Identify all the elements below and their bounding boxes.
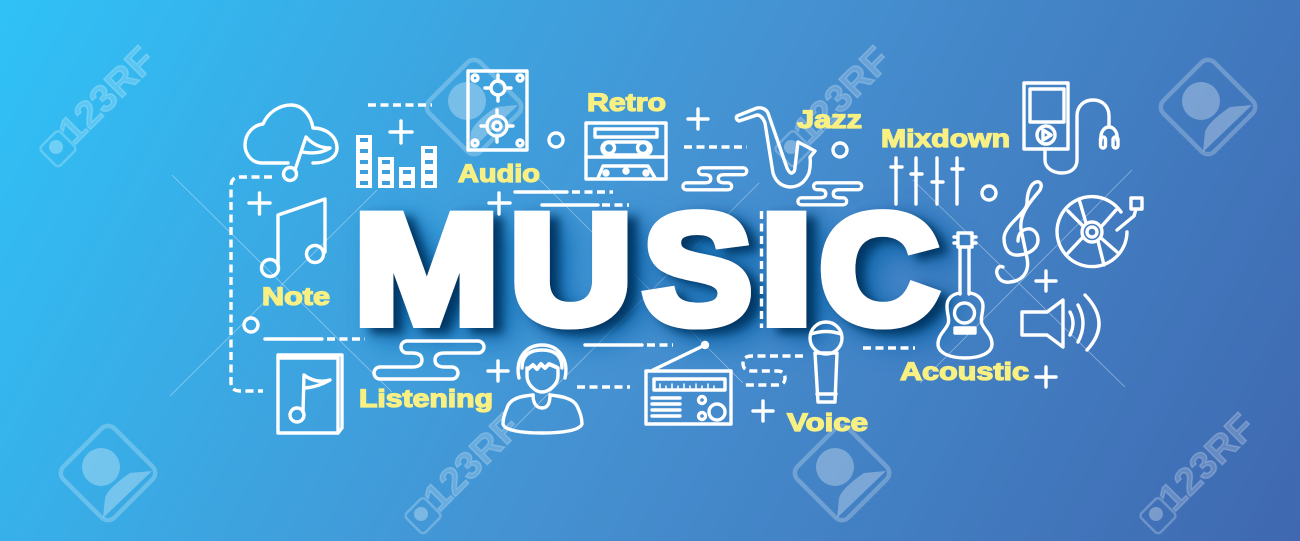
watermark: badge top centre	[423, 56, 525, 158]
title: MUSIC	[354, 181, 939, 357]
watermark: badge bottom left	[57, 422, 159, 524]
icon: saxophone	[736, 108, 815, 187]
label: Audio: Audio	[458, 160, 540, 188]
watermark: badge top right	[1157, 56, 1259, 158]
label: Acoustic: Acoustic	[900, 358, 1029, 386]
label: Voice: Voice	[787, 409, 868, 437]
icon: music book	[278, 355, 342, 433]
icon: treble clef	[997, 182, 1041, 282]
title: MUSIC: I	[760, 181, 813, 356]
label: Retro: Retro	[587, 89, 666, 117]
plus signs	[249, 109, 1056, 421]
title: MUSIC: M	[354, 183, 499, 357]
watermark: 123RF top left: 123RF	[51, 39, 164, 152]
icon: mixer faders	[891, 158, 963, 204]
watermark: 123RF top centre: 123RF	[786, 39, 899, 152]
dashed connector near radio	[742, 356, 803, 385]
icon: squiggle line	[374, 341, 484, 379]
title: MUSIC: C	[819, 182, 939, 357]
watermark: 123RF bottom centre: 123RF	[416, 406, 529, 519]
label: Mixdown: Mixdown	[881, 125, 1010, 153]
icon: person wearing headphones	[503, 345, 582, 433]
icon: microphone	[810, 322, 842, 402]
icon: beamed music notes	[262, 199, 325, 276]
icon: equalizer bars	[356, 135, 437, 188]
label: Note: Note	[262, 283, 330, 311]
label: Listening: Listening	[359, 385, 493, 413]
icon: radio	[646, 342, 731, 424]
watermark: badge bottom centre	[791, 422, 893, 524]
title: MUSIC: U	[510, 182, 632, 356]
icon: portable music player with earphones	[1024, 83, 1118, 173]
dashed connector left side	[231, 177, 272, 391]
icon: cassette tape	[586, 123, 666, 179]
icon: acoustic guitar	[938, 233, 992, 358]
squiggle right of saxophone	[798, 183, 862, 205]
small circles	[244, 133, 996, 332]
icon: loudspeaker cabinet	[468, 71, 527, 150]
icon: cloud with note	[245, 105, 337, 180]
icon: vinyl disc on turntable	[1057, 197, 1142, 267]
squiggle upper middle	[683, 168, 747, 190]
dash and solid line accents	[265, 105, 915, 387]
title: MUSIC: S	[643, 182, 752, 356]
watermark: 123RF bottom right: 123RF	[1151, 406, 1264, 519]
icon: loudspeaker with sound waves	[1022, 295, 1099, 350]
label: Jazz: Jazz	[797, 106, 862, 134]
vertical dashed divider	[760, 211, 763, 328]
